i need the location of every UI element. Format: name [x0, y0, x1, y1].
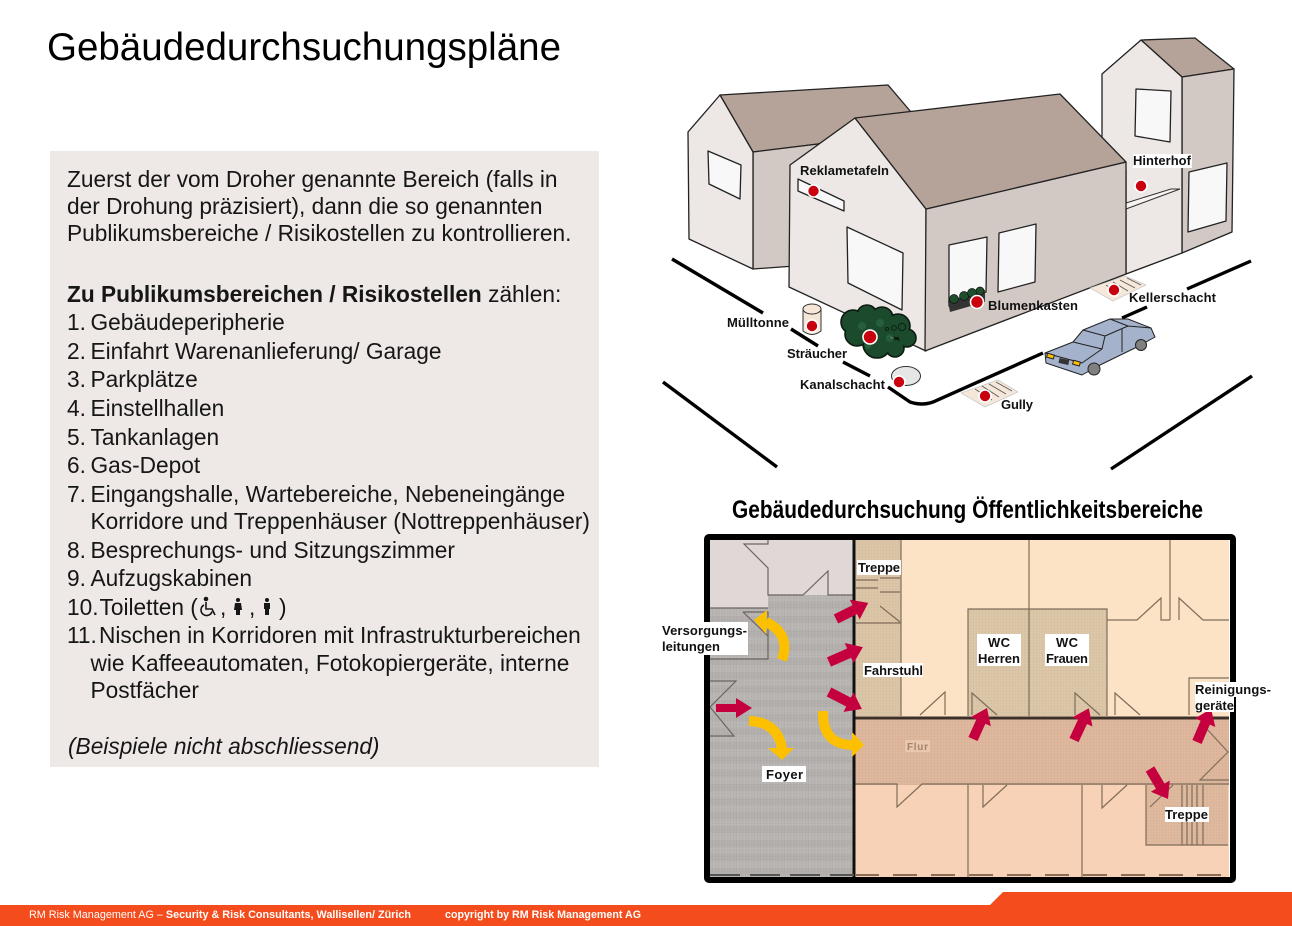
list heading: Zu Publikumsbereichen / Risikostellen zählen:: [67, 281, 561, 307]
floor plan labels: Frauen: [1046, 651, 1088, 666]
numbered list: ): [279, 594, 287, 620]
numbered list: Einfahrt Warenanlieferung/ Garage: [90, 338, 442, 364]
icon: man: [264, 598, 270, 615]
numbered list: Postfächer: [90, 677, 199, 703]
labels: Kanalschacht: [800, 377, 886, 392]
room label: Flur: Flur: [907, 742, 928, 753]
floor plan labels: [662, 560, 1272, 822]
floor plan labels: Reinigungs-: [1195, 682, 1271, 697]
numbered list: 7.: [67, 481, 86, 507]
numbered list: 1.: [67, 309, 86, 335]
floor plan labels: WC: [1056, 635, 1079, 650]
floor plan labels: Herren: [978, 651, 1020, 666]
labels: [727, 153, 1217, 412]
numbered list: Nischen in Korridoren mit Infrastrukturbereichen: [99, 622, 581, 648]
numbered list: Gas-Depot: [90, 452, 201, 478]
numbered list: Korridore und Treppenhäuser (Nottreppenhäuser): [90, 508, 590, 534]
numbered list: 8.: [67, 537, 86, 563]
numbered list: wie Kaffeeautomaten, Fotokopiergeräte, interne: [90, 650, 569, 676]
numbered list: 5.: [67, 424, 86, 450]
floor plan labels: Versorgungs-: [662, 623, 747, 638]
floor plan labels: Fahrstuhl: [864, 663, 923, 678]
numbered list: 11.: [67, 622, 97, 648]
numbered list: [67, 309, 590, 703]
manhole: [892, 366, 920, 386]
footer company text: RM Risk Management AG – Security & Risk Consultants, Wallisellen/ Zürich: [29, 909, 411, 921]
numbered list: 9.: [67, 565, 86, 591]
floor plan: [662, 537, 1272, 880]
panel: Publikumsbereiche text: [50, 151, 599, 767]
numbered list: Parkplätze: [90, 366, 198, 392]
washrooms: [968, 609, 1107, 716]
intro paragraph: Zuerst der vom Droher genannte Bereich (falls in: [67, 166, 558, 192]
rear tower: [1102, 38, 1234, 274]
main house: [789, 94, 1126, 351]
numbered list: 10.: [67, 594, 99, 620]
closing note: (Beispiele nicht abschliessend): [68, 733, 380, 759]
labels: Blumenkasten: [988, 298, 1078, 313]
street lines: [663, 259, 1252, 469]
intro paragraph: der Drohung präzisiert), dann die so genannten: [67, 193, 542, 219]
corridor: [855, 718, 1229, 785]
walls: [710, 540, 1229, 877]
numbered list: 6.: [67, 452, 86, 478]
stair and lift core: [855, 540, 901, 716]
numbered list: 2.: [67, 338, 86, 364]
bushes: [841, 305, 916, 358]
floor plan heading: Gebäudedurchsuchung Öffentlichkeitsbereiche: [732, 495, 1203, 524]
location markers: [806, 180, 1147, 402]
numbered list: Tankanlagen: [90, 424, 219, 450]
intro paragraph: Publikumsbereiche / Risikostellen zu kontrollieren.: [67, 220, 571, 246]
numbered list: Toiletten (: [100, 594, 198, 620]
numbered list: 4.: [67, 395, 86, 421]
billboard: [798, 179, 844, 211]
footer: [0, 892, 1292, 926]
red arrows: [716, 593, 1221, 805]
labels: Sträucher: [787, 346, 847, 361]
gully grating: [961, 380, 1018, 407]
trash bin: [803, 304, 821, 334]
floor plan labels: Foyer: [766, 767, 803, 782]
numbered list: Gebäudeperipherie: [90, 309, 285, 335]
illustration: building exterior: [663, 38, 1252, 469]
floor plan labels: geräte: [1195, 698, 1234, 713]
floor plan labels: leitungen: [662, 639, 720, 654]
numbered list: Eingangshalle, Wartebereiche, Nebeneingänge: [90, 481, 565, 507]
floor plan labels: Treppe: [858, 560, 900, 575]
labels: Hinterhof: [1133, 153, 1192, 168]
numbered list: ,: [249, 594, 255, 620]
labels: Kellerschacht: [1129, 290, 1217, 305]
numbered list: Einstellhallen: [90, 395, 224, 421]
car: [1045, 319, 1155, 375]
numbered list: 3.: [67, 366, 86, 392]
labels: Mülltonne: [727, 315, 789, 330]
footer copyright: copyright by RM Risk Management AG: [445, 909, 641, 921]
labels: Reklametafeln: [800, 163, 889, 178]
numbered list: ,: [220, 594, 226, 620]
intro paragraph: [67, 166, 571, 246]
lower staircase: [1146, 785, 1228, 845]
lower rooms: [855, 784, 1229, 877]
frame: [707, 537, 1233, 880]
cellar grating: [1090, 276, 1146, 301]
flower box: [948, 287, 985, 312]
floor plan labels: WC: [988, 635, 1011, 650]
foyer area: [710, 540, 854, 877]
numbered list: Aufzugskabinen: [90, 565, 252, 591]
icon: woman: [234, 598, 242, 615]
yellow curved arrows: [749, 610, 864, 760]
numbered list: Besprechungs- und Sitzungszimmer: [90, 537, 455, 563]
title: Gebäudedurchsuchungspläne: [47, 26, 561, 69]
left house: [688, 85, 911, 269]
upper rooms: [855, 540, 1229, 718]
labels: Gully: [1001, 397, 1034, 412]
floor plan labels: Treppe: [1165, 807, 1208, 822]
icon: wheelchair: [201, 598, 215, 616]
